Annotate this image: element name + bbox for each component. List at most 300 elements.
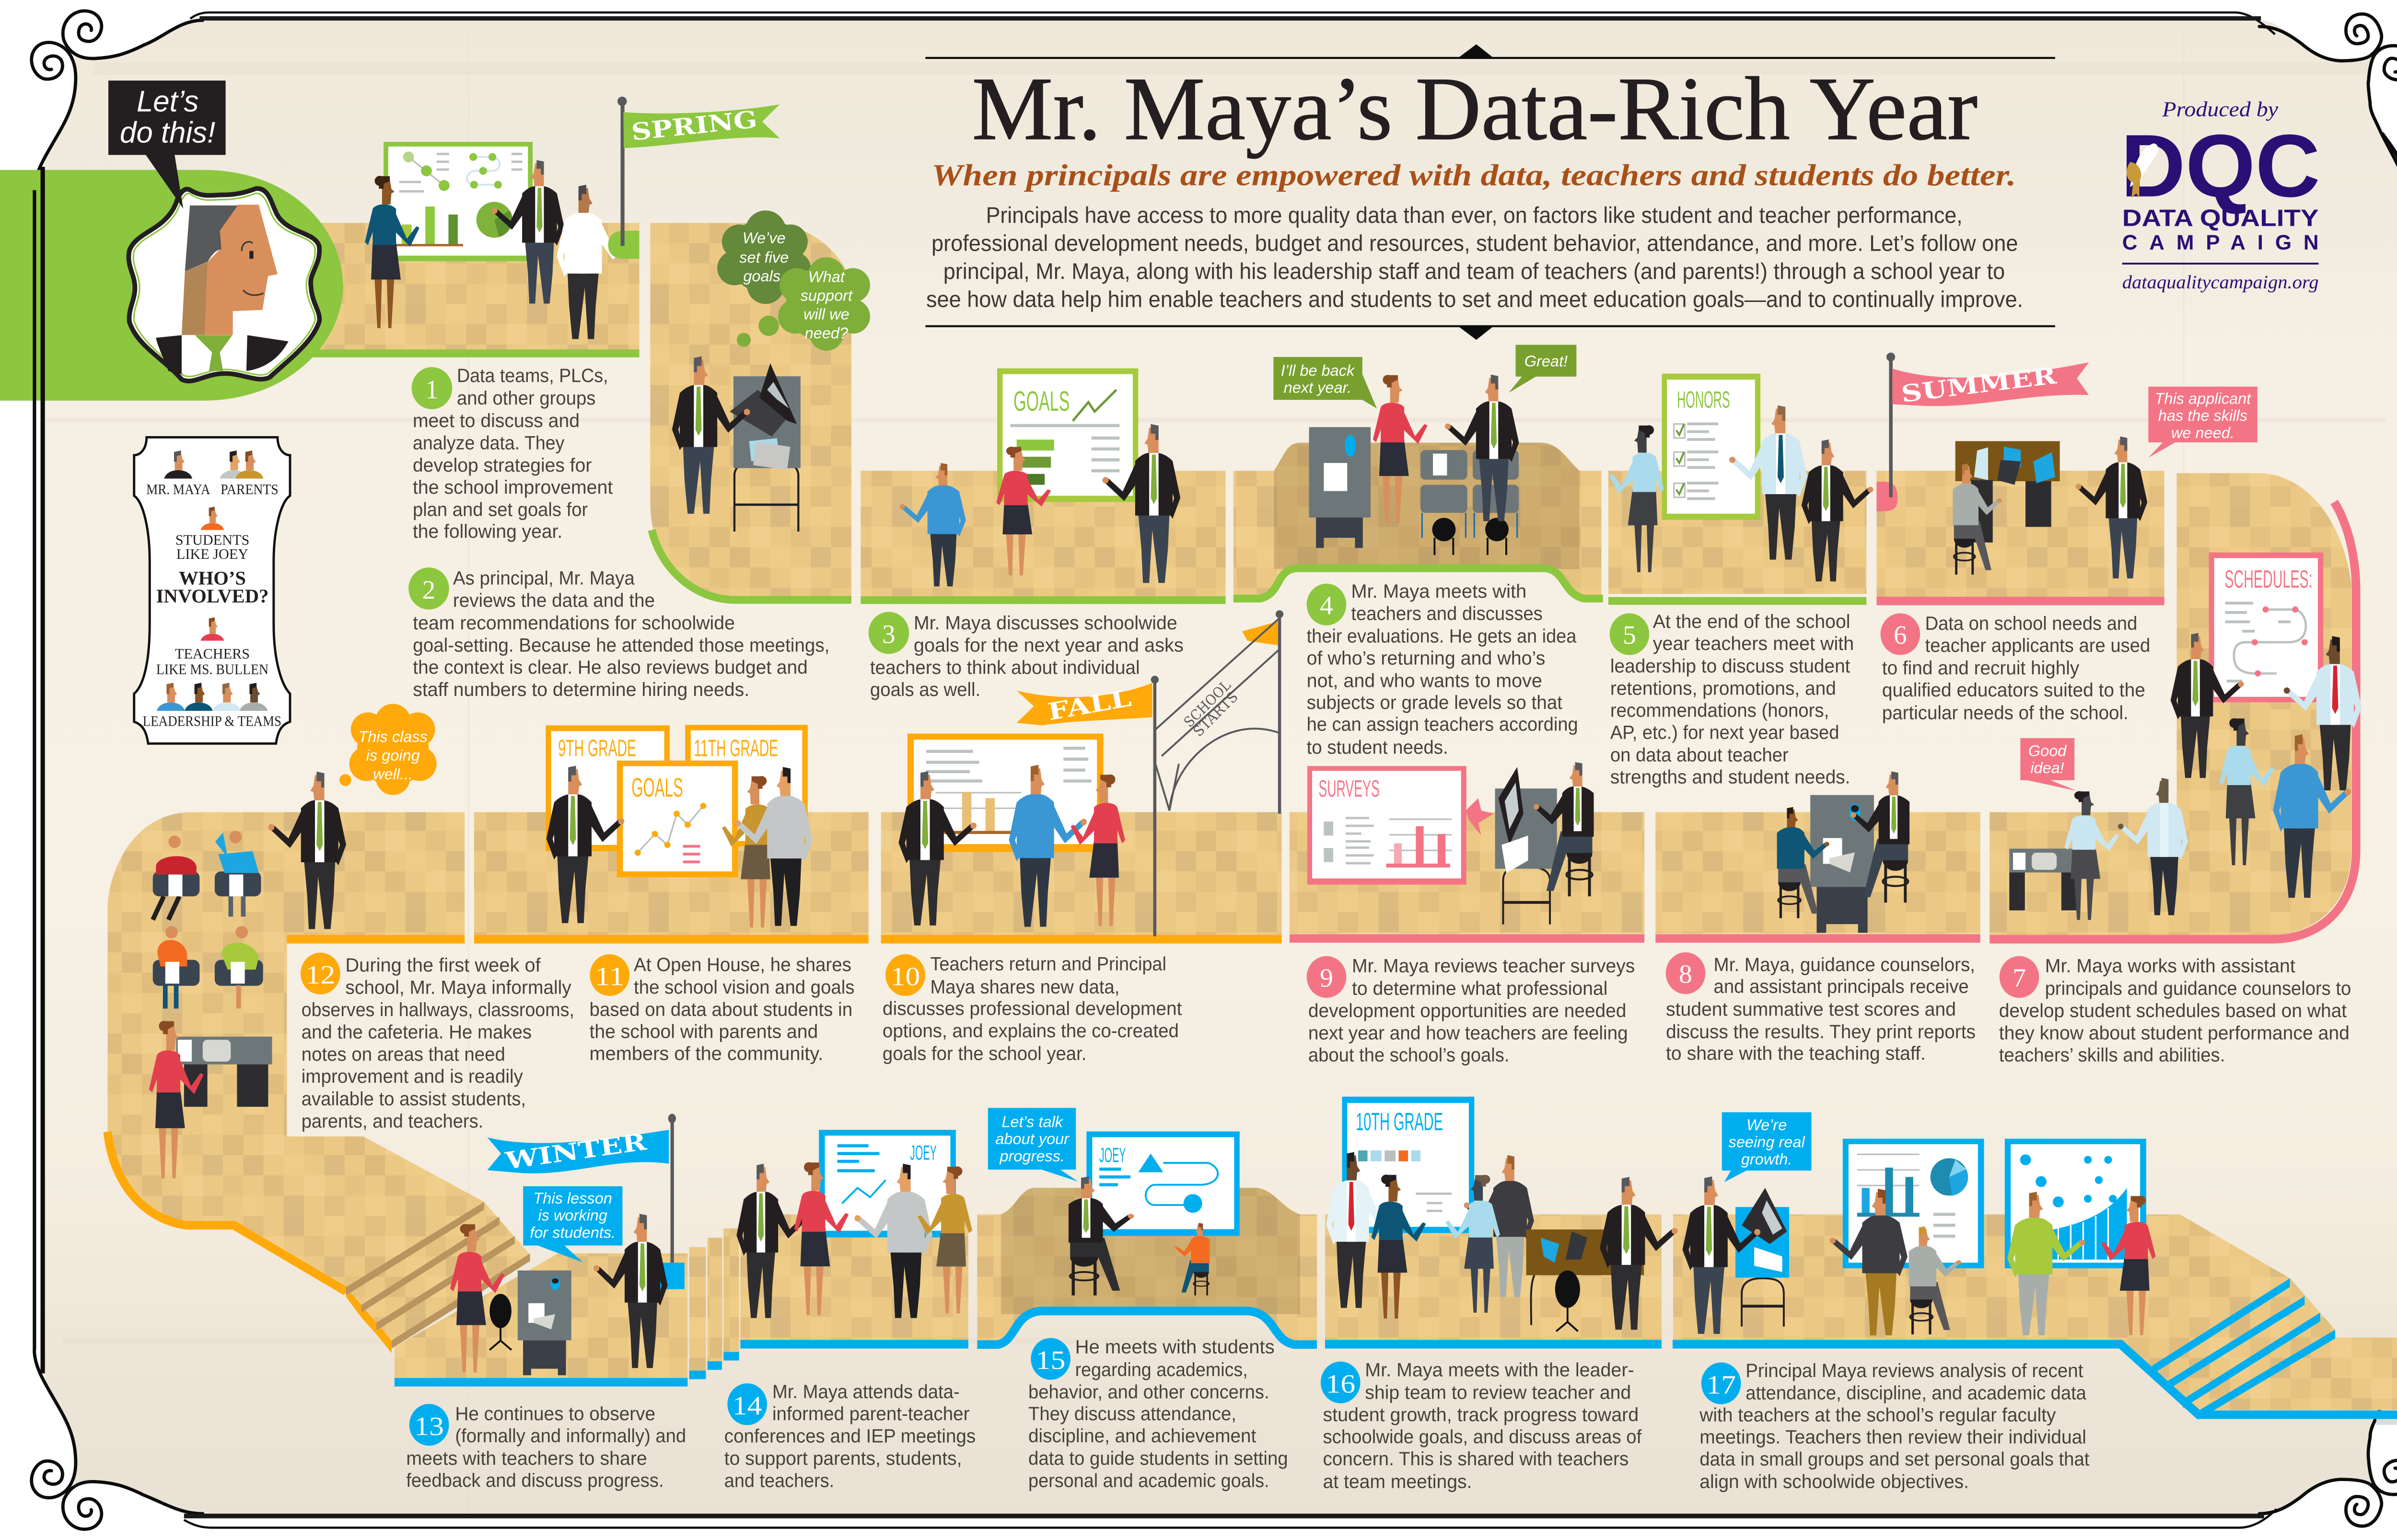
step 4: 4 (1320, 591, 1333, 620)
summer flag (1876, 353, 2089, 511)
figure: woman at desk (1373, 375, 1428, 523)
step 11 (589, 954, 854, 1065)
figure: Mr. Maya at open house (547, 766, 624, 923)
step 3: goals for the next year and asks (914, 635, 1184, 656)
step 17: 17 (1706, 1370, 1736, 1399)
winter flag (487, 1114, 676, 1277)
DQC logo block: DQC (2120, 116, 2320, 216)
board: spring data (384, 142, 533, 261)
filing desk and chairs, panel 4 (1309, 427, 1519, 555)
callout: Good idea: idea! (2030, 759, 2064, 776)
callout: This applicant has the skills: we need. (2171, 424, 2234, 441)
figure: Mr. Maya seated, panel 8 (1850, 771, 1909, 903)
step 14: 14 (733, 1391, 762, 1420)
figure: Mr. Maya seated, panel 15 (1069, 1177, 1134, 1296)
figure: teacher, Ms. Bullen (149, 1021, 204, 1179)
thought bubble: What support will we need: will we (803, 306, 849, 323)
callout: Let's talk about your progress (988, 1108, 1078, 1181)
step 10: Maya shares new data, (930, 976, 1119, 997)
step 13 (406, 1403, 686, 1491)
step 10: goals for the school year. (883, 1043, 1086, 1065)
step 14: Mr. Maya attends data- (772, 1381, 960, 1402)
brown desk, panel 16 (1526, 1229, 1644, 1332)
floor: panel 8 (1655, 812, 1980, 934)
figure: woman in teal (365, 176, 419, 328)
step 9: Mr. Maya reviews teacher surveys (1352, 955, 1635, 976)
board: bar and pie chart (1843, 1139, 1984, 1268)
figure: woman on stairs, panel 13 (450, 1224, 505, 1372)
brown desk with devices, panel 6 (1955, 441, 2060, 543)
figure: Mr. Maya reviewing applicant (2076, 437, 2147, 579)
figure: Mr. Maya, panel 17 (1683, 1177, 1760, 1334)
callout: I'll be back next year: I’ll be back (1281, 362, 1355, 379)
step 10: Teachers return and Principal (930, 954, 1166, 975)
table with laptop, panel 2 (730, 363, 801, 532)
floor: shadow under exit (2376, 1419, 2397, 1425)
step 12: improvement and is readily (302, 1066, 523, 1087)
step 4: teachers and discusses (1351, 603, 1543, 624)
step 3: teachers to think about individual (870, 657, 1140, 678)
callout: This applicant has the skills: This applicant (2155, 390, 2252, 407)
step 17: Principal Maya reviews analysis of recent (1745, 1360, 2083, 1381)
step 13: (formally and informally) and (455, 1425, 686, 1447)
step 7: they know about student performance and (1999, 1022, 2350, 1043)
step 1: develop strategies for (413, 455, 592, 476)
board: Joey, panel 15 (1086, 1132, 1240, 1236)
step 17: attendance, discipline, and academic data (1745, 1382, 2087, 1403)
plaque: who's involved: TEACHERS (175, 646, 250, 662)
plaque: who's involved (134, 437, 290, 743)
fall flag and school gate (1017, 610, 1283, 936)
step 5 (1610, 611, 1854, 788)
callout: I'll be back next year: next year. (1284, 379, 1351, 396)
step 8: to share with the teaching staff. (1666, 1043, 1926, 1064)
step 14: conferences and IEP meetings (724, 1426, 976, 1447)
intro paragraph (926, 202, 2023, 312)
board: 9th grade: 9TH GRADE (558, 735, 636, 761)
figure: woman in light blue (1609, 425, 1664, 572)
step 16: at team meetings. (1323, 1471, 1472, 1492)
stool, panel 13 (489, 1294, 512, 1350)
green opening band (0, 170, 343, 401)
portrait of Mr. Maya (128, 188, 319, 381)
plaque: who's involved: LIKE JOEY (176, 546, 248, 562)
floor: winter steps (689, 1228, 739, 1372)
board: panel 10 (908, 734, 1104, 852)
DQC logo block: DATA QUALITY (2122, 206, 2319, 232)
step 7: teachers’ skills and abilities. (1999, 1045, 2225, 1066)
step 15: discipline, and achievement (1028, 1425, 1256, 1447)
step 6: 6 (1894, 620, 1907, 649)
figure: Mr. Maya presenting, panel 10 (898, 771, 977, 926)
step 16: student growth, track progress toward (1323, 1404, 1639, 1425)
step 5: recommendations (honors, (1610, 700, 1829, 721)
callout: This applicant has the skills (2148, 387, 2257, 458)
summer flag: SUMMER (1900, 361, 2058, 408)
step 1: analyze data. They (413, 433, 564, 454)
figure: seated woman with paper (1953, 463, 2002, 575)
step 16 (1321, 1360, 1642, 1492)
floor: panel 11 (474, 812, 869, 935)
cyan edges for winter floors (395, 1311, 2397, 1415)
step 5: on data about teacher (1610, 744, 1789, 765)
DQC logo block (2120, 98, 2320, 293)
step 14 (724, 1381, 976, 1492)
step 8: 8 (1679, 960, 1692, 989)
step 3: Mr. Maya discusses schoolwide (914, 613, 1177, 634)
step 14: informed parent-teacher (772, 1403, 969, 1424)
figure: Mr. Maya seated, panel 9 (1534, 762, 1594, 896)
floor: panel 4 shading (1274, 443, 1580, 569)
figure: woman in light blue, panel 7 (2220, 718, 2274, 865)
step 1: and other groups (457, 388, 595, 409)
step 6: qualified educators suited to the (1882, 680, 2145, 701)
figure: Mr. Maya, panel 16 (1600, 1177, 1678, 1330)
plaque: who's involved: STUDENTS (175, 532, 249, 548)
fall flag and school gate: STARTS (1190, 688, 1241, 740)
step 12: 12 (306, 960, 335, 989)
plaque: who's involved: LEADERSHIP & TEAMS (143, 713, 281, 729)
step 11: 11 (595, 961, 625, 991)
thought bubble: What support will we need: support (801, 287, 853, 304)
callout: Good idea: Good (2028, 742, 2067, 759)
DQC logo block: CAMPAIGN (2122, 231, 2319, 254)
step 10: discusses professional development (883, 998, 1182, 1019)
step 1: plan and set goals for (413, 499, 588, 521)
figure: woman in teal, panel 16 (1372, 1175, 1426, 1319)
step 15: 15 (1036, 1345, 1065, 1375)
step 16: schoolwide goals, and discuss areas of (1323, 1426, 1642, 1447)
callout: Let's do this (108, 81, 226, 208)
floor: spring panel 1 (280, 223, 640, 351)
callout: This lesson is working: is working (538, 1207, 607, 1224)
step 8: and assistant principals receive (1714, 976, 1969, 997)
step 1: meet to discuss and (413, 410, 580, 431)
intro paragraph: professional development needs, budget and resources, student behavior, attendance, and more. Let’s follow one (931, 231, 2018, 256)
figure: seated woman with laptop (1909, 1227, 1961, 1334)
thought bubble: We've set five goals (717, 210, 811, 304)
figure: man in blue, panel 7 (2273, 734, 2351, 898)
figure: man in grey, panel 14 (854, 1164, 932, 1318)
step 7: develop student schedules based on what (1999, 1000, 2347, 1021)
step 15: data to guide students in setting (1028, 1448, 1288, 1469)
floor: panel 12, left column and stairs (107, 812, 530, 1341)
callout: Let's talk about your progress: Let’s talk (1001, 1113, 1064, 1130)
callout: Let's talk about your progress: progress. (999, 1147, 1065, 1165)
step 16: 16 (1326, 1369, 1355, 1398)
board: Joey, panel 15: JOEY (1099, 1144, 1126, 1167)
step 13: He continues to observe (455, 1403, 655, 1424)
callout: Let's do this: Let’s (137, 85, 198, 118)
floor: panel 9 (1290, 812, 1644, 934)
step 7: Mr. Maya works with assistant (2045, 955, 2295, 976)
winter flag: WINTER (503, 1127, 648, 1175)
board: 10th grade (1342, 1097, 1474, 1233)
top rule with diamond (925, 44, 2055, 59)
figure: Mr. Maya at laptop (672, 356, 750, 514)
figure: woman in gold, panel 14 (918, 1167, 972, 1313)
figure: woman in red (996, 447, 1051, 576)
board: honors (1662, 374, 1760, 520)
DQC logo block: dataqualitycampaign.org (2122, 272, 2319, 293)
callout: We're seeing real growth: We’re (1746, 1116, 1787, 1134)
frame left double rule (33, 167, 45, 1373)
step 17: meetings. Teachers then review their individual (1699, 1427, 2086, 1448)
thought bubble: We've set five goals: set five (739, 249, 789, 266)
title: Mr. Maya’s Data-Rich Year (972, 58, 1978, 159)
thought bubble: This class is going well: is going (366, 747, 420, 764)
fall flag and school gate: FALL (1046, 684, 1133, 726)
figure: Mr. Maya with goals (1103, 424, 1180, 583)
orange stair risers (346, 1287, 392, 1353)
step 9: 9 (1320, 963, 1333, 993)
step 13: meets with teachers to share (406, 1448, 647, 1469)
plaque: who's involved: MR. MAYA (146, 481, 210, 498)
step 13: 13 (414, 1412, 444, 1441)
step 5: leadership to discuss student (1610, 656, 1850, 677)
figure: woman in red, panel 10 (1071, 775, 1125, 926)
step 7: 7 (2013, 963, 2026, 993)
callout: This lesson is working: for students. (530, 1224, 616, 1241)
step 8: Mr. Maya, guidance counselors, (1714, 954, 1975, 975)
floor: panel 15 shading (1001, 1188, 1300, 1314)
step 15: behavior, and other concerns. (1028, 1381, 1269, 1402)
callout: Let's talk about your progress: about your (995, 1130, 1070, 1147)
callout: We're seeing real growth (1722, 1112, 1811, 1182)
floor: panel 13 (395, 1253, 687, 1378)
figure: man in blue, panel 10 (1009, 765, 1087, 927)
thought bubble: We've set five goals: We’ve (743, 229, 786, 246)
floor: panel 15 (977, 1188, 1317, 1341)
step 6: particular needs of the school. (1882, 703, 2129, 724)
board: goals (997, 369, 1138, 502)
figure: Mr. Maya with hands on hips (1802, 440, 1873, 581)
step 2 (408, 567, 829, 700)
thought bubble: This class is going well: well... (373, 765, 413, 783)
step 12: parents, and teachers. (302, 1111, 483, 1132)
step 2: reviews the data and the (453, 590, 655, 611)
step 1: the following year. (413, 521, 562, 542)
board: 11th grade (685, 725, 808, 846)
step 15: regarding academics, (1075, 1359, 1248, 1380)
floor: spring panel 2 (650, 223, 851, 597)
step 16: concern. This is shared with teachers (1323, 1448, 1629, 1470)
step 14: to support parents, students, (724, 1448, 962, 1469)
cyan table block (660, 1262, 685, 1289)
step 3 (869, 612, 1184, 700)
step 5: AP, etc.) for next year based (1610, 722, 1839, 743)
floor: summer column and panel 7 (1990, 473, 2351, 935)
thought bubble: This class is going well: This class (358, 728, 428, 745)
floor: panel 6 (1876, 471, 2164, 597)
step 10: 10 (891, 961, 920, 991)
step 17: align with schoolwide objectives. (1699, 1471, 1969, 1492)
desk, panel 7 (2009, 849, 2079, 910)
step 15: personal and academic goals. (1028, 1471, 1269, 1492)
step 11: members of the community. (589, 1043, 823, 1065)
orange edges for fall floors (107, 939, 1282, 1292)
step 4: to student needs. (1307, 737, 1448, 758)
step 2: the context is clear. He also reviews budget and (413, 657, 808, 678)
board: honors: HONORS (1677, 387, 1730, 413)
board: growth chart (2005, 1139, 2146, 1268)
figure: Joey, student with book (1174, 1223, 1210, 1296)
figure: seated woman in teal (1777, 807, 1829, 918)
step 15 (1028, 1337, 1288, 1492)
figure: Mr. Maya at board (492, 160, 564, 303)
floor: panel 10 (881, 812, 1282, 935)
step 12: available to assist students, (302, 1088, 526, 1110)
step 5: year teachers meet with (1653, 633, 1854, 654)
step 10: options, and explains the co-created (883, 1020, 1179, 1042)
bottom rule with diamond (925, 325, 2055, 340)
figure: man with red tie, panel 16 (1326, 1152, 1400, 1308)
callout: This lesson is working (523, 1186, 622, 1262)
step 12: notes on areas that need (302, 1044, 505, 1065)
callout: This applicant has the skills: has the skills (2158, 407, 2247, 424)
step 1: Data teams, PLCs, (457, 365, 608, 386)
step 6 (1881, 613, 2150, 724)
callout: This lesson is working: This lesson (533, 1190, 612, 1207)
intro paragraph: Principals have access to more quality data than ever, on factors like student and teacher performance, (986, 202, 1963, 228)
thought bubble: What support will we need (737, 257, 870, 351)
step 12: and the cafeteria. He makes (302, 1022, 532, 1043)
cyan table with laptop (1735, 1188, 1789, 1327)
left stair treads (346, 1202, 530, 1348)
step 15: He meets with students (1075, 1337, 1275, 1358)
thought bubble: We've set five goals: goals. (743, 267, 785, 285)
pink edges for summer floors (1290, 502, 2356, 939)
floor: panel 16 (1325, 1215, 1662, 1341)
board: 10th grade: 10TH GRADE (1356, 1108, 1443, 1136)
desk, panel 8 (1810, 795, 1874, 933)
step 9: to determine what professional (1352, 978, 1607, 999)
plaque: who's involved: PARENTS (221, 481, 279, 498)
board: 9th grade (546, 725, 670, 851)
step 6: to find and recruit highly (1882, 658, 2079, 679)
board: goals: GOALS (1013, 386, 1070, 417)
figure: man in pale shirt (2118, 778, 2188, 915)
callout: Let's do this: do this! (120, 116, 215, 150)
step 2: As principal, Mr. Maya (453, 568, 635, 589)
step 5: retentions, promotions, and (1610, 678, 1836, 699)
floor: panel 4 with raised centre (1233, 443, 1601, 595)
step 3: goals as well. (870, 679, 980, 700)
figure: man in dark shirt, mustard trousers (1829, 1189, 1908, 1335)
board: schedules (2209, 553, 2323, 702)
students at desks (153, 831, 263, 1008)
board: surveys: SURVEYS (1318, 776, 1380, 802)
step 5: 5 (1623, 620, 1636, 649)
figure: Mr. Maya observing with clipboard (268, 772, 346, 929)
step 17 (1699, 1360, 2089, 1492)
step 7 (1999, 955, 2351, 1066)
board: goals, fall (617, 761, 738, 877)
step 2: staff numbers to determine hiring needs. (413, 679, 749, 700)
step 4 (1307, 581, 1578, 758)
figure: man in green shirt (2007, 1192, 2085, 1335)
thought bubble: What support will we need: need? (805, 324, 848, 342)
step 9: next year and how teachers are feeling (1308, 1022, 1628, 1043)
step 12: During the first week of (345, 955, 541, 976)
figure: woman in red, panel 14 (794, 1162, 849, 1315)
step 8 (1666, 952, 1976, 1064)
step 4: he can assign teachers according (1307, 714, 1578, 735)
step 11: the school with parents and (589, 1021, 818, 1042)
figure: woman in red, panel 17 (2101, 1196, 2156, 1335)
step 13: feedback and discuss progress. (406, 1470, 664, 1491)
plaque: who's involved: INVOLVED? (156, 585, 268, 607)
green edges for spring floors (273, 353, 1866, 601)
floor: panel 3 (861, 471, 1226, 597)
spring flag (608, 97, 780, 259)
intro paragraph: see how data help him enable teachers and students to set and meet education goals—and to continually improve. (926, 287, 2023, 312)
step 5: At the end of the school (1653, 611, 1850, 632)
step 2: 2 (422, 575, 435, 604)
step 8: discuss the results. They print reports (1666, 1021, 1976, 1042)
step 15: They discuss attendance, (1028, 1403, 1236, 1424)
board: schedules: SCHEDULES: (2224, 566, 2313, 593)
DQC logo block: Produced by (2162, 98, 2279, 121)
step 1: 1 (425, 375, 439, 404)
step 6: Data on school needs and (1925, 613, 2137, 634)
spring flag: SPRING (630, 105, 758, 146)
floor: panel 14 (740, 1215, 968, 1341)
step 12 (301, 953, 574, 1132)
plaque: who's involved: LIKE MS. BULLEN (156, 661, 268, 678)
board: goals, fall: GOALS (631, 773, 683, 802)
callout: Great: Great! (1524, 352, 1568, 370)
step 9: about the school’s goals. (1308, 1045, 1509, 1066)
step 7: principals and guidance counselors to (2045, 978, 2351, 999)
desk, panel 13 (518, 1271, 571, 1375)
step 4: subjects or grade levels so that (1307, 692, 1562, 713)
step 4: their evaluations. He gets an idea (1307, 626, 1577, 647)
board: 11th grade: 11TH GRADE (694, 735, 778, 761)
figure: man with red tie (2284, 636, 2362, 790)
subtitle: When principals are empowered with data, teachers and students do better. (931, 158, 2016, 192)
step 4: of who’s returning and who’s (1307, 648, 1545, 669)
step 16: Mr. Maya meets with the leader- (1365, 1360, 1634, 1381)
step 11: based on data about students in (589, 999, 852, 1020)
board: Joey, panel 14: JOEY (910, 1142, 937, 1164)
step 11: the school vision and goals (634, 977, 854, 998)
figure: man in white shirt (557, 185, 635, 339)
step 17: data in small groups and set personal goals that (1699, 1449, 2089, 1470)
figure: man in dark sweater (1464, 1155, 1534, 1297)
fall flag and school gate: SCHOOL (1181, 677, 1234, 730)
figure: man in blue (900, 463, 966, 587)
figure: parent, woman in gold (722, 776, 777, 927)
step 2: goal-setting. Because he attended those meetings, (413, 635, 829, 656)
callout: Great (1509, 345, 1576, 393)
figure: Mr. Maya, panel 13 (593, 1214, 668, 1368)
step 5: strengths and student needs. (1610, 767, 1850, 788)
figure: Mr. Maya with clipboard (1445, 375, 1519, 521)
figure: woman perched on desk (2064, 791, 2119, 920)
step 12: observes in hallways, classrooms, (302, 999, 574, 1020)
step 2: team recommendations for schoolwide (413, 613, 735, 634)
step 4: Mr. Maya meets with (1351, 581, 1526, 602)
step 12: school, Mr. Maya informally (345, 977, 571, 998)
step 11: At Open House, he shares (634, 954, 851, 975)
teacher's desk, left column (176, 1037, 272, 1107)
step 4: not, and who wants to move (1307, 671, 1542, 692)
floor: panel 17, stairs and exit (1673, 1215, 2397, 1410)
thought bubble: What support will we need: What (808, 268, 846, 286)
callout: Good idea (2020, 738, 2077, 791)
step 9: development opportunities are needed (1308, 1000, 1626, 1021)
